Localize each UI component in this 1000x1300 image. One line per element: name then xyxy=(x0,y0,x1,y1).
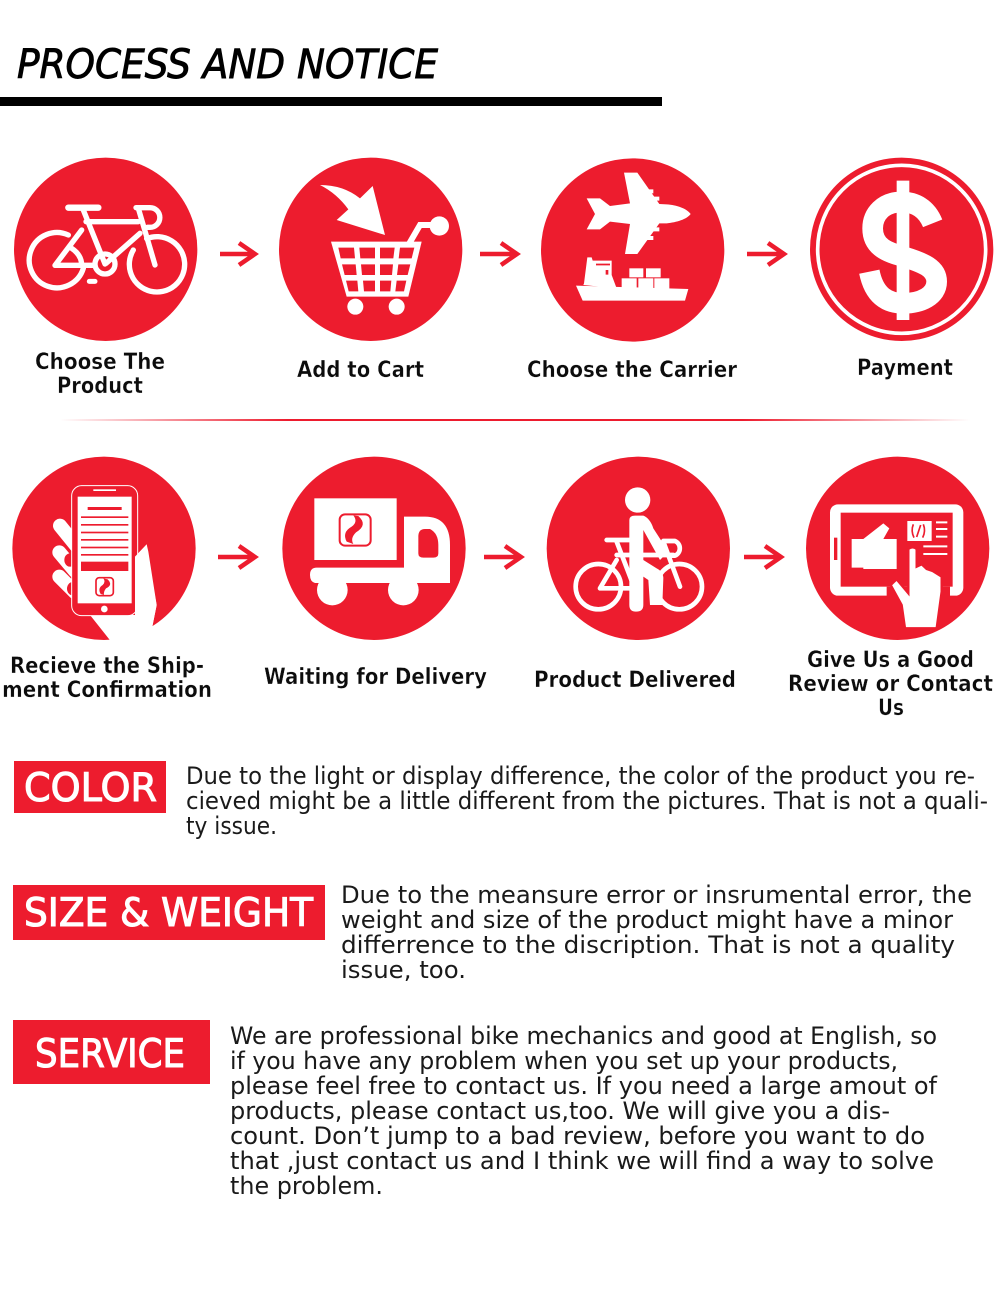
panel: size and weight notice: Due to the meansure error or insrumental error, the xyxy=(341,881,972,909)
panel: color notice: Due to the light or display difference, the color of the product you re- xyxy=(186,762,975,790)
panel: size and weight notice: differrence to the discription. That is not a quality xyxy=(341,931,955,959)
arrow xyxy=(744,546,781,568)
step labels, row one: Choose The xyxy=(35,350,165,375)
step labels, row one: Payment xyxy=(857,356,953,381)
arrow xyxy=(480,243,517,265)
panel: color notice: COLOR xyxy=(24,766,157,811)
step labels, row two: Us xyxy=(878,696,904,721)
arrow xyxy=(747,243,784,265)
title: PROCESS AND NOTICE xyxy=(17,42,439,88)
panel: service notice: count. Don’t jump to a bad review, before you want to do xyxy=(230,1122,925,1150)
panel: service notice: products, please contact us,too. We will give you a dis- xyxy=(230,1097,890,1125)
step labels, row two: Give Us a Good xyxy=(807,648,974,673)
divider xyxy=(60,419,970,421)
title xyxy=(0,42,662,106)
panel: size and weight notice xyxy=(13,881,972,984)
panel: size and weight notice: weight and size of the product might have a minor xyxy=(341,906,953,934)
step labels, row two xyxy=(2,648,993,721)
panel: service notice: We are professional bike mechanics and good at English, so xyxy=(230,1022,937,1050)
step labels, row two: Waiting for Delivery xyxy=(264,665,487,690)
panel: service notice: SERVICE xyxy=(35,1032,185,1077)
step labels, row one: Product xyxy=(57,374,143,399)
icon: person with bicycle in red circle xyxy=(547,457,730,640)
panel: service notice: the problem. xyxy=(230,1172,383,1200)
panel: size and weight notice: issue, too. xyxy=(341,956,466,984)
icon: phone confirmation in red circle xyxy=(12,457,196,642)
step labels, row two: ment Confirmation xyxy=(2,678,212,703)
panel: color notice: ty issue. xyxy=(186,812,277,840)
step labels, row two: Product Delivered xyxy=(534,668,736,693)
arrow xyxy=(218,546,255,568)
icon: tablet with thumbs up and hand in red circle xyxy=(806,457,989,640)
arrow xyxy=(484,546,521,568)
panel: service notice: that ,just contact us and I think we will find a way to solve xyxy=(230,1147,934,1175)
icon: dollar sign in red circle xyxy=(810,158,993,341)
icon: shopping cart in red circle xyxy=(279,158,462,341)
icon: bicycle in red circle xyxy=(14,158,197,341)
panel: size and weight notice: SIZE & WEIGHT xyxy=(24,891,313,936)
step labels, row one xyxy=(35,350,953,399)
panel: service notice xyxy=(13,1020,938,1200)
panel: service notice: if you have any problem when you set up your products, xyxy=(230,1047,898,1075)
step labels, row one: Choose the Carrier xyxy=(527,358,737,383)
arrow xyxy=(220,243,255,265)
step labels, row one: Add to Cart xyxy=(297,358,424,383)
panel: service notice: please feel free to contact us. If you need a large amout of xyxy=(230,1072,938,1100)
icon: plane and ship in red circle xyxy=(541,158,724,342)
panel: color notice xyxy=(14,761,988,840)
step labels, row two: Recieve the Ship- xyxy=(10,654,204,679)
icon: delivery truck in red circle xyxy=(282,457,466,640)
